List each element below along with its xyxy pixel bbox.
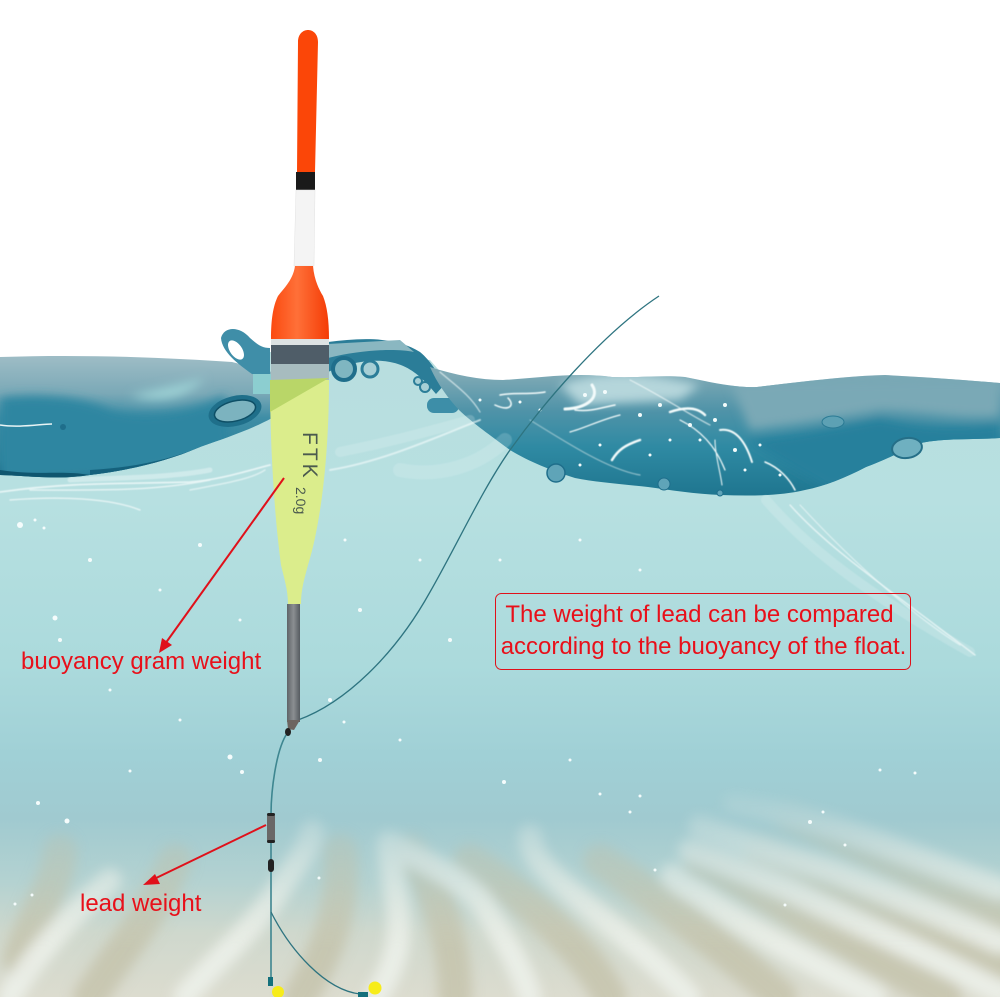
float: white band bbox=[294, 190, 315, 266]
waves: crest behind float bbox=[328, 339, 459, 413]
waves: bubbles on right wave bbox=[547, 416, 923, 496]
waves: left surface water bbox=[0, 329, 272, 480]
callout: lead weight comparison note: The weight of lead can be compared bbox=[505, 601, 894, 628]
waves: white foam on right wave bbox=[440, 372, 795, 490]
float: fluorescent yellow body bbox=[270, 380, 329, 604]
sand ripples bbox=[10, 800, 1000, 997]
splash foam under the surface bbox=[0, 420, 975, 655]
callout: lead weight comparison note bbox=[496, 594, 910, 670]
label: buoyancy gram weight: buoyancy gram weight bbox=[21, 648, 261, 675]
float: grey stem bbox=[287, 604, 300, 722]
float: black band bbox=[296, 172, 315, 190]
label: lead weight: lead weight bbox=[80, 890, 202, 917]
rig: lead weight sleeve bbox=[267, 815, 275, 842]
float: dark collar bbox=[271, 345, 329, 364]
waves: right surface water bbox=[430, 367, 1000, 495]
bubbles bbox=[14, 518, 916, 906]
float: orange shoulder bbox=[271, 266, 329, 339]
float bbox=[270, 30, 329, 730]
float: orange antenna tip bbox=[297, 30, 318, 172]
callout: lead weight comparison note: according to the buoyancy of the float. bbox=[501, 633, 906, 660]
rig: yellow hook beads bbox=[272, 986, 284, 998]
arrow: to lead weight bbox=[143, 825, 266, 885]
rig: line, lead weight and hooks bbox=[0, 728, 1000, 1000]
float: FTK label: FTK bbox=[298, 432, 321, 481]
fishing line: main line to upper right bbox=[298, 296, 659, 720]
foam specks on right wave bbox=[478, 390, 782, 476]
rig: black stopper bbox=[268, 859, 274, 872]
float: 2.0g bbox=[293, 487, 309, 514]
arrow: to float body bbox=[159, 478, 284, 653]
